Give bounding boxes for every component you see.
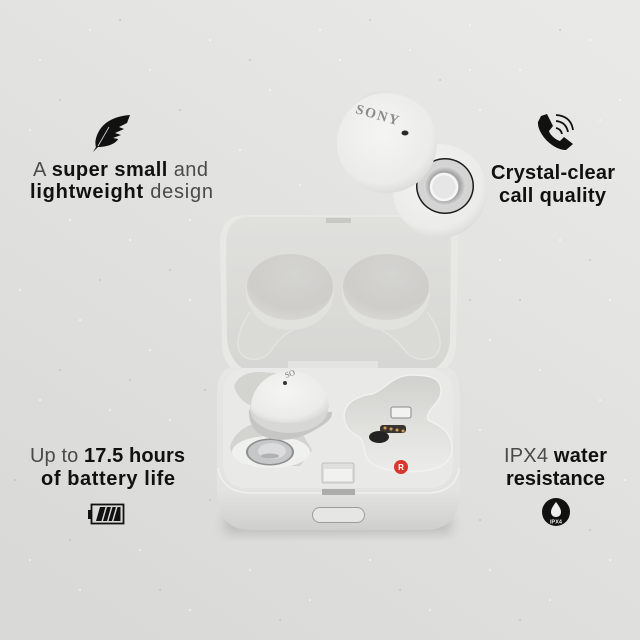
floating earbud: dome side bbox=[337, 91, 437, 193]
SONY logo: SONY bbox=[354, 102, 400, 129]
heading line 2: of battery life bbox=[41, 468, 175, 490]
heading line 1: Up to 17.5 hours bbox=[30, 445, 185, 467]
right charging well: R bbox=[398, 463, 404, 472]
feature: battery life bbox=[30, 445, 185, 524]
microphone hole bbox=[402, 130, 408, 136]
heading line 2: resistance bbox=[506, 468, 605, 490]
charging contacts bbox=[380, 425, 406, 433]
charging clip bbox=[391, 407, 411, 418]
case base bbox=[217, 368, 460, 530]
front lip line bbox=[218, 468, 459, 493]
red logo bbox=[394, 460, 408, 474]
inner tray bbox=[223, 368, 453, 488]
heading line 2: lightweight design bbox=[30, 181, 213, 203]
right dimple bbox=[342, 254, 440, 359]
icon: water drop: IPX4 bbox=[550, 520, 563, 526]
left dimple bbox=[238, 254, 334, 359]
earbud in case: dome bbox=[249, 368, 332, 440]
latch bbox=[322, 463, 355, 495]
button bbox=[312, 508, 364, 522]
right charging well bbox=[344, 375, 452, 474]
earbud in case: ring side bbox=[232, 436, 310, 468]
feature: lightweight design bbox=[30, 115, 213, 203]
feature: call quality bbox=[491, 114, 615, 207]
icon: phone bbox=[538, 114, 573, 150]
heading line 2: call quality bbox=[499, 185, 607, 207]
charging case bbox=[217, 215, 460, 530]
lid notch bbox=[326, 218, 351, 223]
floating earbud: ring side bbox=[393, 144, 487, 238]
case shadow bbox=[225, 515, 451, 533]
earbud in case: dome: SO bbox=[284, 368, 297, 380]
feature: water resistance bbox=[504, 445, 607, 526]
heading line 1: A super small and bbox=[33, 159, 208, 181]
sensor bbox=[369, 431, 389, 443]
case lid bbox=[220, 215, 458, 375]
icon: feather bbox=[93, 115, 130, 152]
left wells bbox=[230, 372, 312, 466]
hinge bbox=[288, 361, 378, 375]
heading line 1: IPX4 water bbox=[504, 445, 607, 467]
icon: battery bbox=[88, 504, 124, 524]
heading line 1: Crystal-clear bbox=[491, 162, 615, 184]
